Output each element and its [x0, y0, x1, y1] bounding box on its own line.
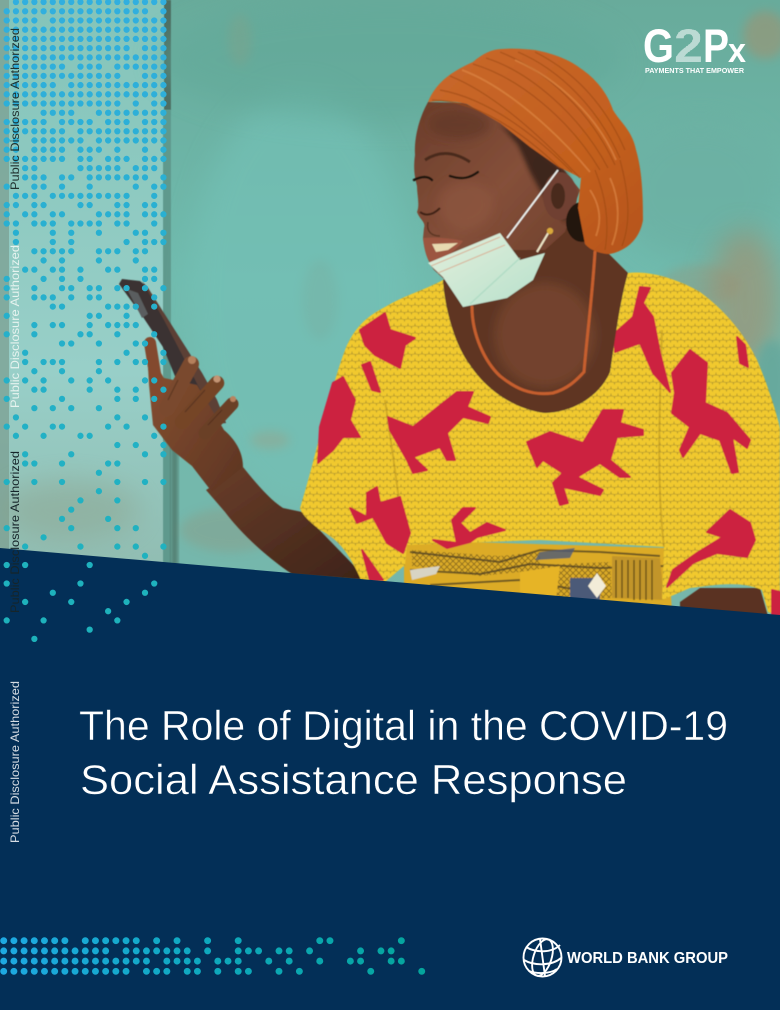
earring — [547, 228, 553, 234]
side labels: Public Disclosure Authorized: Public Disclosure Authorized — [9, 681, 22, 843]
navy diagonal panel — [0, 548, 780, 1010]
woman holding phone — [119, 49, 780, 616]
title: The Role of Digital in the COVID-19 — [79, 702, 728, 749]
title: Social Assistance Response — [80, 756, 627, 803]
side labels: Public Disclosure Authorized: Public Disclosure Authorized — [9, 245, 22, 408]
waist wrap — [404, 540, 672, 612]
title — [79, 702, 728, 803]
logo: World Bank Group — [524, 937, 728, 978]
side labels: Public Disclosure Authorized: Public Disclosure Authorized — [9, 28, 22, 190]
photo background: teal wall — [0, 0, 780, 620]
hair bun — [566, 202, 598, 242]
logo: G2Px: PAYMENTS THAT EMPOWER — [645, 66, 745, 75]
side labels: Public Disclosure Authorized — [9, 28, 22, 843]
hand and fingers — [147, 343, 243, 492]
logo: G2Px: 2 — [674, 19, 703, 72]
icon: globe — [524, 937, 562, 978]
beaded necklace — [472, 252, 595, 394]
face — [414, 102, 580, 280]
bottom dot strip — [4, 941, 422, 971]
face mask — [428, 170, 558, 307]
logo: G2Px: G — [643, 19, 674, 72]
neck and chest — [443, 215, 628, 413]
logo: G2Px: x — [728, 32, 746, 70]
right arm below sleeve — [680, 588, 768, 616]
orange head wrap — [428, 49, 643, 254]
forearm — [206, 467, 368, 580]
logo: G2Px: P — [703, 19, 729, 72]
vertical dot pattern — [7, 2, 164, 639]
side labels: Public Disclosure Authorized: Public Disclosure Authorized — [9, 451, 22, 613]
yellow dress — [300, 272, 780, 616]
logo: G2Px — [643, 19, 746, 75]
ear — [543, 172, 577, 220]
phone — [119, 279, 226, 424]
red horse prints — [318, 287, 780, 615]
logo: World Bank Group: WORLD BANK GROUP — [567, 950, 728, 967]
